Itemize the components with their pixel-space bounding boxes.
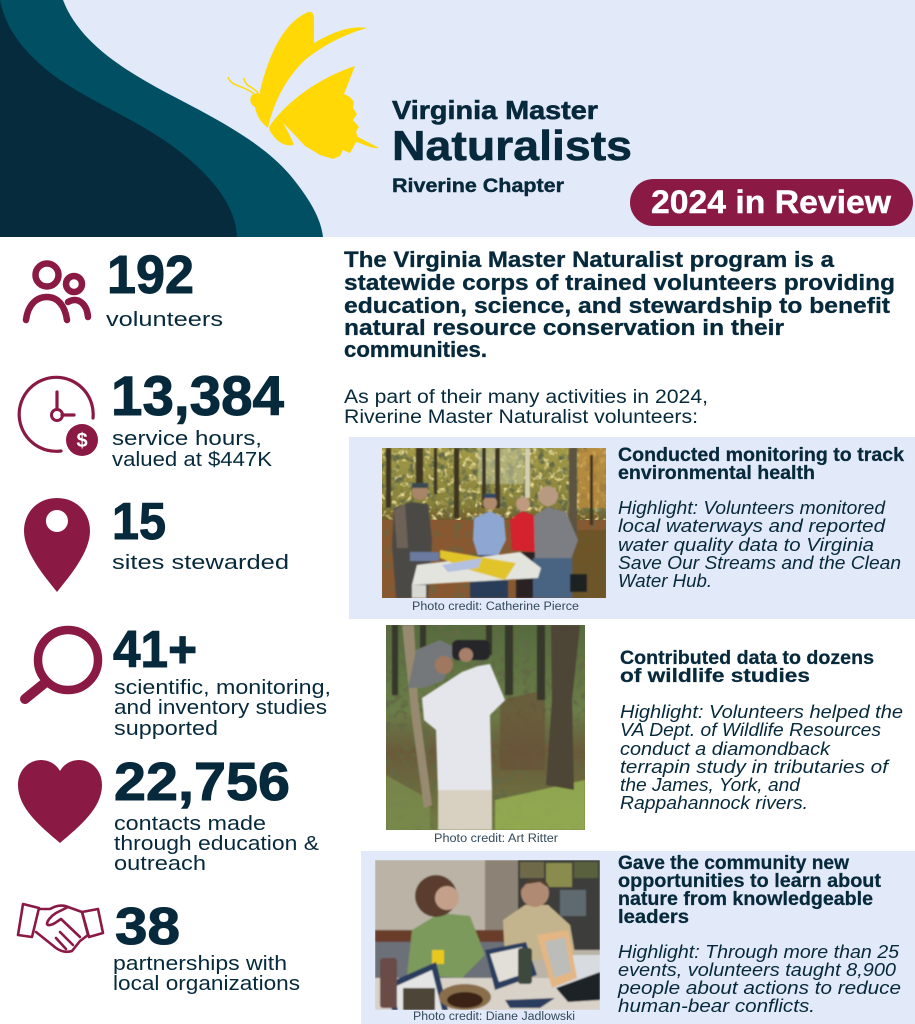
badge: 2024 in Review: 2024 in Review	[651, 184, 891, 220]
stat: contacts made: through education &	[114, 833, 320, 855]
icon: clock with dollar: $	[76, 430, 88, 452]
stat: studies supported: supported	[114, 718, 218, 740]
dark navy river curve	[0, 0, 237, 237]
stat: partnerships	[18, 898, 300, 995]
icon: heart	[18, 760, 102, 843]
frames and signs	[384, 962, 448, 1010]
heading: leaders	[618, 907, 689, 928]
stat: volunteers: 192	[107, 245, 194, 305]
highlight text	[618, 498, 901, 591]
photo: volunteers at outreach table	[375, 860, 600, 1010]
photo: volunteer with binoculars	[386, 625, 585, 830]
person 4	[538, 486, 558, 506]
stat: sites stewarded: sites stewarded	[112, 552, 289, 574]
icon: people	[26, 264, 88, 320]
heading	[618, 853, 882, 928]
woman	[407, 913, 485, 978]
intro paragraph: statewide corps of trained volunteers providing	[344, 270, 895, 295]
stat: studies supported: 41+	[113, 621, 197, 679]
highlight text: terrapin study in tributaries of	[620, 757, 890, 777]
intro paragraph: education, science, and stewardship to benefit	[344, 293, 891, 318]
stat: service hours: service hours,	[112, 428, 262, 450]
intro paragraph	[344, 247, 895, 362]
highlight text: people about actions to reduce	[617, 978, 901, 998]
icon: handshake	[18, 904, 103, 952]
person 1	[412, 487, 428, 500]
highlight text: Water Hub.	[618, 571, 712, 591]
man	[503, 905, 576, 960]
highlight text	[617, 942, 901, 1016]
highlight text: conduct a diamondback	[620, 739, 831, 759]
intro paragraph: natural resource conservation in their	[344, 315, 784, 340]
highlight text: Rappahannock rivers.	[620, 793, 808, 813]
lead-in text: As part of their many activities in 2024,	[344, 387, 708, 408]
panel: wildlife studies	[386, 625, 903, 845]
title: Naturalists	[392, 122, 632, 169]
highlight text: the James, York, and	[620, 775, 801, 795]
highlight text: VA Dept. of Wildlife Resources	[620, 720, 881, 740]
highlight text: Highlight: Through more than 25	[618, 942, 900, 962]
stat: partnerships: 38	[115, 898, 180, 956]
highlight text	[620, 702, 903, 813]
highlight text: events, volunteers taught 8,900	[618, 960, 896, 980]
teal river curve	[0, 0, 323, 237]
table	[375, 978, 600, 1010]
title: Riverine Chapter	[392, 176, 565, 197]
heading	[618, 445, 904, 484]
highlight text: Highlight: Volunteers helped the	[620, 702, 903, 722]
panel: community learning	[361, 851, 915, 1024]
highlight text: human-bear conflicts.	[618, 996, 815, 1016]
stat: service hours: 13,384	[111, 364, 284, 427]
stat: contacts made: 22,756	[114, 752, 290, 812]
heading: nature from knowledgeable	[618, 889, 873, 910]
stat: partnerships: local organizations	[113, 973, 300, 995]
stat: contacts made: outreach	[114, 853, 206, 875]
intro paragraph: communities.	[344, 337, 487, 362]
stat: contacts made	[18, 752, 320, 875]
photo: volunteers at table in forest	[382, 448, 606, 598]
title	[392, 95, 632, 197]
person 2	[483, 496, 497, 510]
panel: monitoring	[349, 437, 915, 619]
stat: service hours	[19, 364, 284, 471]
photo credit: Photo credit: Art Ritter	[434, 833, 558, 845]
stat: sites stewarded	[24, 493, 289, 592]
stat: volunteers: volunteers	[106, 309, 223, 331]
stat: studies supported: scientific, monitoring,	[114, 677, 331, 699]
badge: 2024 in Review	[630, 179, 913, 226]
table	[412, 552, 541, 585]
highlight text: local waterways and reported	[618, 516, 886, 536]
highlight text: Save Our Streams and the Clean	[618, 553, 901, 573]
heading: Gave the community new	[618, 853, 849, 874]
header banner	[0, 0, 915, 237]
icon: map pin	[24, 498, 90, 592]
icon: clock with dollar	[19, 377, 98, 456]
highlight text: water quality data to Virginia	[618, 535, 874, 555]
heading: environmental health	[618, 463, 815, 484]
stat: partnerships: partnerships with	[113, 953, 287, 975]
icon: yellow butterfly logo	[228, 12, 379, 159]
intro paragraph: The Virginia Master Naturalist program is a	[344, 247, 835, 272]
person 3	[516, 497, 530, 511]
stat: sites stewarded: 15	[112, 493, 166, 551]
stat: volunteers	[26, 245, 223, 331]
stat: studies supported	[25, 621, 331, 740]
title: Virginia Master	[392, 95, 598, 125]
lead-in text	[344, 387, 708, 428]
heading: Conducted monitoring to track	[618, 445, 904, 466]
stat: service hours: valued at $447K	[112, 449, 273, 471]
lead-in text: Riverine Master Naturalist volunteers:	[344, 407, 698, 428]
photo credit: Photo credit: Diane Jadlowski	[413, 1011, 575, 1023]
heading	[620, 648, 874, 687]
stat: studies supported: and inventory studies	[114, 697, 327, 719]
photo credit: Photo credit: Catherine Pierce	[412, 601, 579, 613]
icon: magnifying glass	[25, 630, 98, 699]
heading: opportunities to learn about	[618, 871, 882, 892]
heading: Contributed data to dozens	[620, 648, 874, 669]
highlight text: Highlight: Volunteers monitored	[618, 498, 886, 518]
heading: of wildlife studies	[620, 666, 810, 687]
stat: contacts made: contacts made	[114, 813, 266, 835]
